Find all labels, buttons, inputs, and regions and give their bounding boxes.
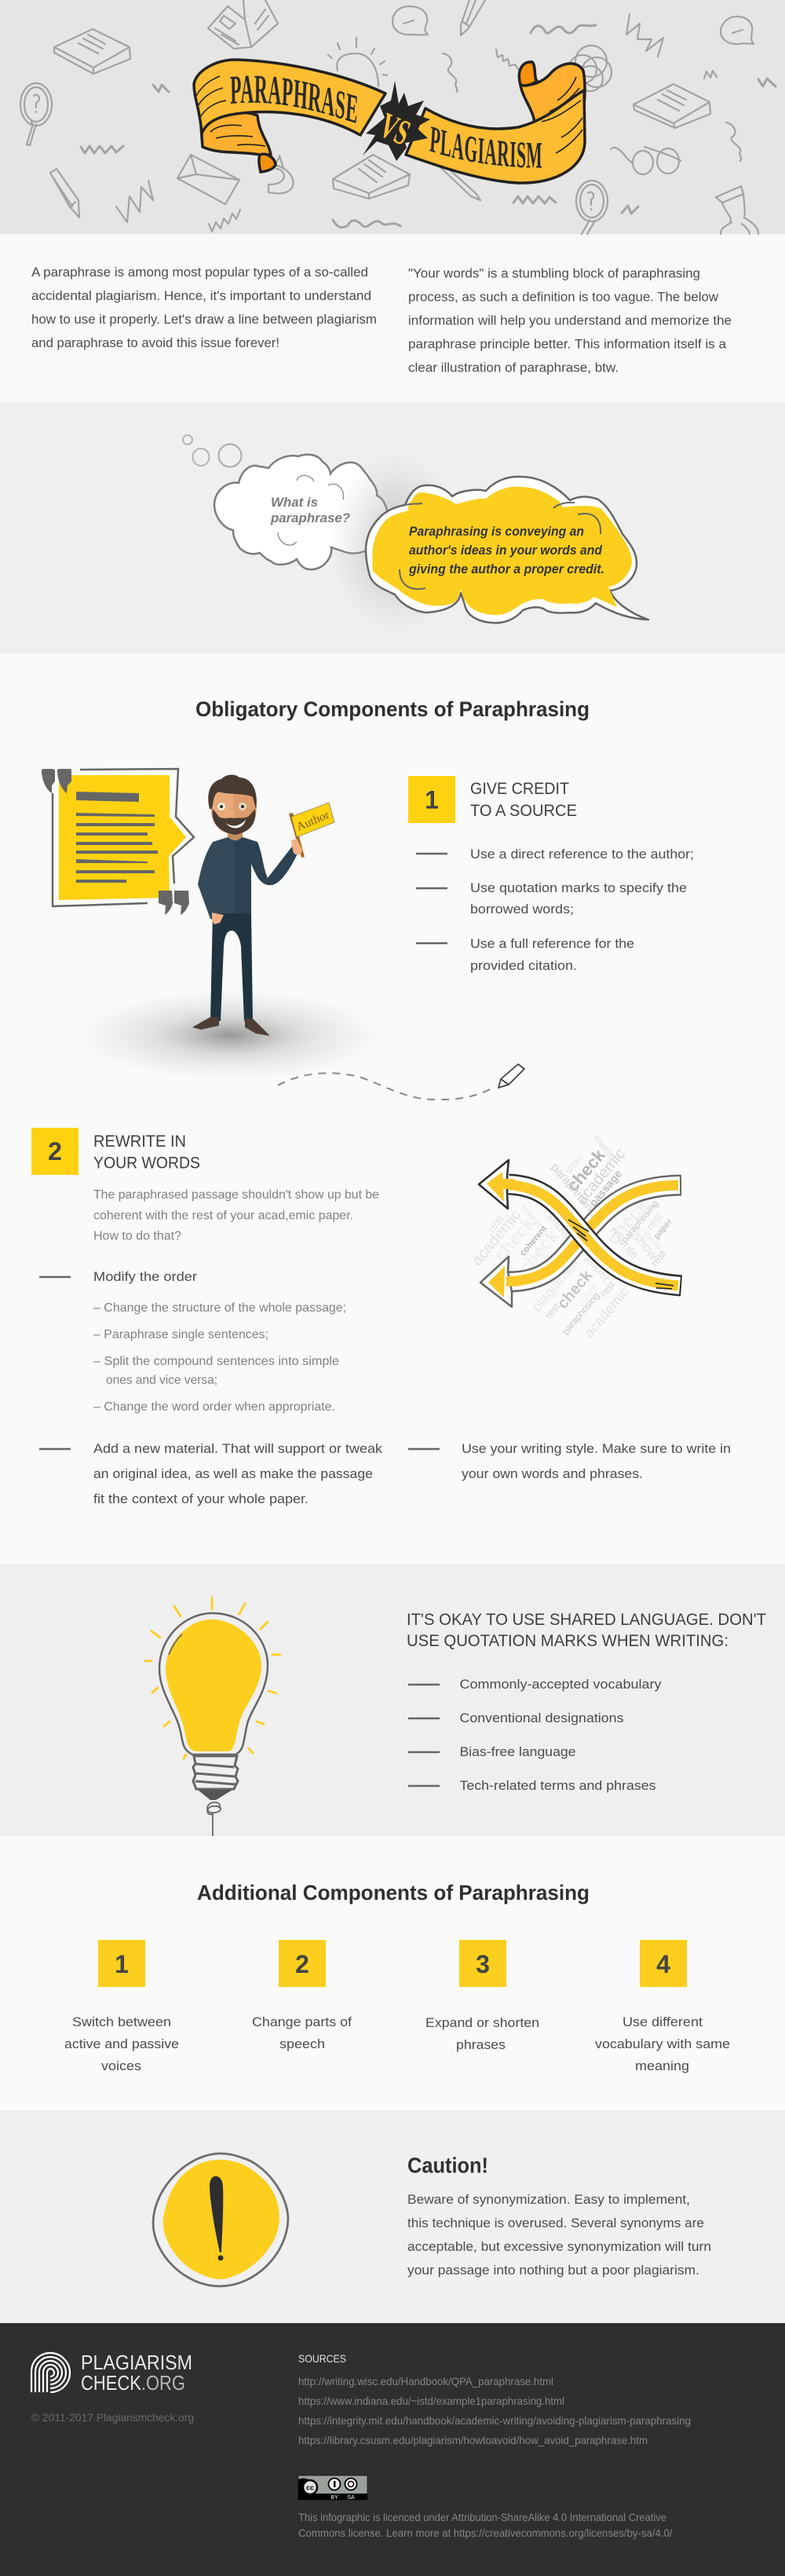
step 2 number: 2 (48, 1137, 62, 1165)
step 1 list: Use quotation marks to specify the (470, 880, 687, 895)
question text (270, 496, 350, 525)
step 2 title: REWRITE IN (93, 1132, 186, 1151)
additional component 2: Change parts of (252, 2014, 352, 2029)
bulb base (193, 1756, 238, 1789)
word cloud (468, 1132, 674, 1341)
footer logo (31, 2351, 192, 2395)
word cloud: show (563, 1152, 586, 1176)
yellow speech bubble outline (366, 477, 648, 623)
crossing arrows with word cloud (468, 1132, 681, 1341)
word cloud: rewrite (519, 1202, 546, 1231)
bulb rays (145, 1597, 280, 1758)
man: beard (213, 809, 255, 835)
answer text: giving the author a proper credit. (408, 562, 604, 576)
banner: PLAGIARISM text: PLAGIARISM (429, 126, 542, 168)
word cloud: check (514, 1225, 563, 1278)
man: shoes (192, 1017, 270, 1036)
word cloud: rest (485, 1213, 506, 1235)
additional component 4: Use different (623, 2014, 703, 2029)
modify the order: Modify the order (93, 1269, 197, 1284)
word cloud: academic (572, 1145, 629, 1208)
illustration: author with quoted document (42, 769, 383, 1081)
icon: zigzag bottom (209, 210, 240, 232)
icon: glasses (611, 147, 681, 163)
additional component 3: 3 (476, 1950, 490, 1978)
icon: pencil center (440, 165, 480, 200)
heading: obligatory components: Obligatory Components of Paraphrasing (195, 697, 590, 721)
shared language heading: IT'S OKAY TO USE SHARED LANGUAGE. DON'T (407, 1610, 766, 1629)
word cloud: paper (582, 1252, 613, 1285)
caution body: Beware of synonymization. Easy to implement, (407, 2192, 690, 2207)
caution body: acceptable, but excessive synonymization will turn (407, 2239, 711, 2254)
title banner (192, 58, 586, 185)
word cloud: passage (586, 1167, 624, 1209)
icon: wave bottom (333, 220, 400, 228)
icon: magnifier right (576, 181, 608, 221)
caution body: this technique is overused. Several synonyms are (407, 2216, 704, 2230)
modify the order sublist: – Paraphrase single sentences; (93, 1328, 268, 1341)
word cloud: show (543, 1209, 575, 1242)
step 1 list (416, 847, 694, 973)
shared language list (408, 1677, 662, 1793)
icon: squiggle upper (443, 53, 457, 92)
icon: closed book right (633, 84, 710, 128)
modify the order sublist: ones and vice versa; (106, 1374, 217, 1387)
caution body (407, 2192, 711, 2278)
word cloud: paper (652, 1217, 674, 1241)
icon: magnifier left (20, 83, 52, 126)
closing quotation mark (159, 891, 189, 915)
intro text right: process, as such a definition is too vague. The below (408, 289, 719, 305)
licence text: This infographic is licenced under Attribution-ShareAlike 4.0 International Creative (298, 2511, 666, 2523)
additional component 2 (252, 1940, 352, 2051)
icon: zigzag top (626, 14, 663, 57)
question text: paraphrase? (270, 511, 350, 525)
banner: VS label: VS (374, 106, 416, 154)
icon: open book (208, 0, 278, 49)
cloud shadow (330, 453, 463, 634)
step 2 description (93, 1188, 379, 1242)
icon: closed book center (333, 155, 410, 199)
modify the order sublist (93, 1301, 346, 1414)
additional component 4: vocabulary with same (595, 2036, 730, 2051)
banner: right fold (520, 64, 585, 130)
icon: speech bubble top (392, 6, 428, 35)
banner: right strip (406, 90, 585, 183)
step 1 list: Use a full reference for the (470, 936, 634, 951)
word cloud: coherent (518, 1224, 549, 1258)
additional component 3: Expand or shorten (425, 2015, 539, 2030)
white thought cloud (214, 455, 388, 569)
word cloud: check (563, 1145, 609, 1195)
step 1 list: borrowed words; (470, 902, 574, 917)
step 2 description: coherent with the rest of your acad,emic paper. (93, 1209, 353, 1222)
intro text left: and paraphrase to avoid this issue forever! (31, 335, 279, 350)
word cloud: show (630, 1229, 662, 1263)
bulb highlight (169, 1634, 182, 1655)
licence text (298, 2511, 673, 2539)
flag label: Author (294, 809, 331, 834)
banner: left fold (201, 112, 271, 155)
banner: hatch marks (196, 76, 582, 153)
additional component 2: speech (279, 2036, 325, 2051)
intro text left: how to use it properly. Let's draw a line between plagiarism (31, 312, 377, 327)
add a new material (39, 1441, 383, 1506)
icon: www left (81, 146, 123, 153)
dashed pencil trail (278, 1064, 524, 1100)
additional component 2: 2 (295, 1950, 309, 1978)
heading: additional components: Additional Components of Paraphrasing (197, 1881, 590, 1905)
word cloud: academic (581, 1284, 632, 1341)
shared language list: Tech-related terms and phrases (460, 1778, 656, 1793)
answer text (408, 525, 604, 576)
document frame (53, 769, 194, 906)
intro text left: A paraphrase is among most popular types of a so-called (31, 265, 368, 280)
word cloud: paraphrising (548, 1161, 600, 1219)
word cloud: check (554, 1267, 597, 1312)
icon: small zigzag right edge (758, 79, 776, 86)
step 1 number (408, 776, 455, 823)
step 1 number: 1 (425, 785, 439, 814)
additional component 3 (425, 1940, 539, 2052)
intro text right: "Your words" is a stumbling block of paraphrasing (408, 265, 700, 281)
word cloud: rest (597, 1279, 618, 1299)
creative commons badge: cc (306, 2483, 314, 2491)
additional component 4 (595, 1940, 730, 2073)
add a new material: fit the context of your whole paper. (93, 1491, 309, 1506)
answer text: author's ideas in your words and (409, 543, 603, 558)
intro text right: information will help you understand and memorize the (408, 313, 732, 328)
man: head (210, 784, 257, 835)
thought dots (183, 435, 242, 467)
icon: fingerprint P (31, 2353, 70, 2392)
word cloud: rest (644, 1210, 665, 1232)
use your writing style (408, 1441, 731, 1481)
intro text right (408, 265, 732, 375)
creative commons badge (298, 2475, 367, 2501)
shared language heading (407, 1610, 766, 1650)
word cloud: paraphrising (560, 1290, 602, 1337)
icon: refresh arrow (268, 156, 294, 193)
word cloud: plagiarism (528, 1255, 582, 1315)
document lines (76, 792, 158, 883)
step 2 description: The paraphrased passage shouldn't show up but be (93, 1188, 379, 1202)
word cloud: rewrite (607, 1224, 641, 1262)
additional component 1: 1 (115, 1950, 129, 1978)
word cloud: check (490, 1213, 539, 1265)
shared language heading: USE QUOTATION MARKS WHEN WRITING: (407, 1631, 728, 1650)
use your writing style: your own words and phrases. (462, 1466, 643, 1481)
icon: light bulb (145, 1597, 280, 1836)
hero doodle pattern (20, 0, 776, 234)
icon: venn circles (575, 46, 607, 77)
icon: light bulb doodle (328, 38, 387, 86)
step 1 list: Use a direct reference to the author; (470, 847, 694, 862)
shared language list: Commonly-accepted vocabulary (460, 1677, 662, 1692)
step 1 list: provided citation. (470, 958, 577, 973)
add a new material: Add a new material. That will support or tweak (93, 1441, 383, 1456)
man: neck (228, 829, 243, 848)
yellow bubble fill (372, 487, 632, 615)
step 2 title (93, 1132, 200, 1172)
additional component 1: active and passive (64, 2036, 179, 2051)
additional component 1: Switch between (72, 2014, 171, 2029)
icon: wave top (531, 25, 596, 33)
intro text left (31, 265, 377, 350)
bulb yellow fill (166, 1619, 261, 1751)
banner: PARAPHRASE text: PARAPHRASE (230, 75, 357, 123)
sources: http://writing.wisc.edu/Handbook/QPA_paraphrase.html (298, 2375, 553, 2388)
step 1 title: TO A SOURCE (470, 801, 577, 820)
bulb wire (207, 1802, 221, 1836)
sources: https://www.indiana.edu/~istd/example1paraphrasing.html (298, 2395, 564, 2407)
man: legs (210, 913, 253, 1021)
word cloud: paraphrising (619, 1198, 661, 1245)
man: hand on hip (212, 913, 224, 924)
word cloud: rewrite (591, 1132, 618, 1162)
intro text right: paraphrase principle better. This information itself is a (408, 336, 727, 352)
word cloud: rewrite (640, 1227, 664, 1253)
word cloud: show (579, 1282, 600, 1304)
additional component 4: 4 (656, 1950, 670, 1978)
speech clouds (183, 435, 648, 634)
footer logo: CHECK.ORG (81, 2371, 185, 2395)
bubble creases (400, 503, 601, 589)
icon: caution exclamation (153, 2153, 288, 2286)
icon: speech bubble right (721, 16, 754, 44)
step 1 title (470, 779, 577, 820)
word cloud: academic (468, 1206, 524, 1269)
step 2 title: YOUR WORDS (93, 1153, 200, 1172)
icon: pencil (498, 1064, 524, 1088)
sources (298, 2352, 691, 2446)
yellow document (59, 775, 186, 900)
icon: envelope (177, 155, 239, 204)
caution body: your passage into nothing but a poor plagiarism. (407, 2263, 699, 2278)
icon: www bottom (513, 196, 556, 203)
icon: small zigzag left (153, 85, 169, 92)
step 1 title: GIVE CREDIT (470, 779, 569, 798)
man: eyes (217, 803, 246, 810)
flag (291, 803, 334, 837)
creative commons badge: BY (330, 2495, 338, 2501)
shared language list: Conventional designations (460, 1711, 623, 1725)
icon: pencil left (50, 169, 79, 218)
icon: zigzag left (116, 181, 153, 222)
wordmark: PLAGIARISM (81, 2351, 192, 2374)
man: torso and arms (198, 837, 298, 920)
additional component 3: phrases (456, 2037, 506, 2052)
floor shadow (77, 990, 383, 1081)
shared language list: Bias-free language (460, 1744, 576, 1759)
answer text: Paraphrasing is conveying an (409, 525, 584, 539)
intro text right: clear illustration of paraphrase, btw. (408, 360, 619, 375)
icon: small zigzag M (704, 71, 717, 79)
banner: tear burst (363, 81, 430, 161)
question text: What is (271, 496, 318, 510)
icon: squiggle right (726, 123, 741, 161)
flag pole (289, 813, 305, 858)
man: raised hand (291, 839, 302, 855)
icon: hourglass (716, 186, 758, 234)
use your writing style: Use your writing style. Make sure to write in (462, 1441, 731, 1456)
caution heading: Caution! (407, 2153, 488, 2177)
arrow: gray to lower left (480, 1185, 681, 1307)
sources: https://integrity.mit.edu/handbook/academic-writing/avoiding-plagiarism-paraphrasing (298, 2414, 691, 2427)
word cloud: rest (542, 1301, 563, 1321)
additional component 4: meaning (635, 2058, 689, 2073)
word cloud: check (602, 1195, 653, 1250)
additional component 1 (64, 1940, 179, 2073)
man: hair (208, 774, 257, 809)
sources: SOURCES (298, 2352, 346, 2365)
banner: left strip (194, 60, 385, 135)
icon: small zigzag (496, 49, 518, 69)
add a new material: an original idea, as well as make the passage (93, 1466, 373, 1481)
word cloud: rest (648, 1248, 669, 1268)
modify the order sublist: – Change the structure of the whole passage; (93, 1301, 346, 1315)
cloud creases (278, 475, 343, 545)
arrow: dark to upper left (479, 1160, 681, 1289)
icon: pencil top (461, 0, 485, 35)
additional component 1: voices (101, 2058, 141, 2073)
licence text: Commons license. Learn more at https://creativecommons.org/licenses/by-sa/4.0/ (298, 2527, 673, 2539)
icon: closed book left (54, 29, 130, 74)
step 2 description: How to do that? (93, 1230, 181, 1242)
sources: https://library.csusm.edu/plagiarism/howtoavoid/how_avoid_paraphrase.htm (298, 2434, 648, 2446)
icon: small n zigzag (622, 206, 638, 214)
modify the order sublist: – Change the word order when appropriate. (93, 1400, 335, 1414)
copyright: © 2011-2017 Plagiarismcheck.org (31, 2411, 194, 2424)
modify the order sublist: – Split the compound sentences into simple (93, 1355, 339, 1368)
creative commons badge: SA (347, 2495, 355, 2501)
intro text left: accidental plagiarism. Hence, it's important to understand (31, 288, 371, 303)
bulb outline (159, 1613, 268, 1755)
step 2 number (31, 1128, 78, 1175)
opening quotation mark (42, 769, 71, 793)
